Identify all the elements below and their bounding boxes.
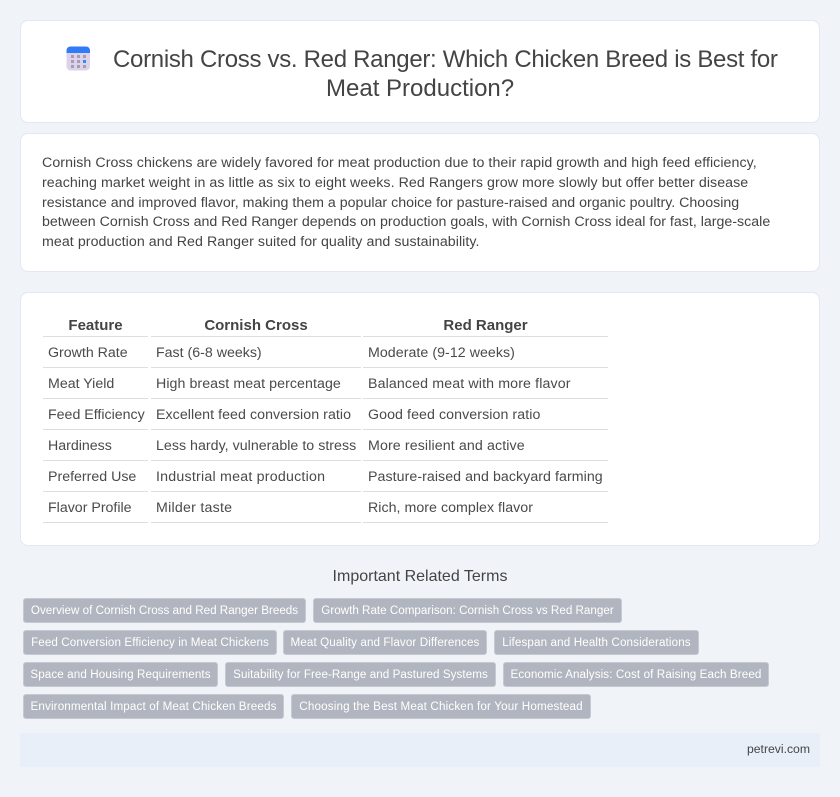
- row: preferred use: Pasture-raised and backyard farming: [368, 469, 603, 485]
- table header: Cornish Cross: [204, 317, 308, 334]
- heading: important related terms: Important Related Terms: [333, 568, 507, 585]
- tag: [283, 630, 487, 655]
- row: hardiness: Less hardy, vulnerable to stress: [156, 438, 356, 454]
- title: Cornish Cross vs. Red Ranger: Which Chicken Breed is Best for: [113, 46, 778, 73]
- panel: comparison table: [20, 292, 820, 546]
- tag: [291, 694, 591, 719]
- row: flavor profile: Flavor Profile: [48, 500, 132, 516]
- title: [113, 46, 778, 102]
- row: feed efficiency: Good feed conversion ratio: [368, 407, 540, 423]
- row: meat yield: High breast meat percentage: [156, 376, 341, 392]
- tag: [494, 630, 699, 655]
- row: hardiness: Hardiness: [48, 438, 112, 454]
- tag: Lifespan and Health Considerations: [502, 636, 691, 649]
- tag: Economic Analysis: Cost of Raising Each Breed: [510, 668, 762, 681]
- table header: [68, 317, 528, 334]
- tag: [225, 662, 496, 687]
- footer: [20, 733, 820, 767]
- row: growth rate: Growth Rate: [48, 345, 128, 361]
- icon: calendar: [66, 46, 90, 70]
- tag: [313, 598, 622, 623]
- row: growth rate: Fast (6-8 weeks): [156, 345, 262, 361]
- tag: [23, 662, 218, 687]
- tag: Environmental Impact of Meat Chicken Breeds: [30, 700, 277, 713]
- panel: introduction text: reaching market weight in as little as six to eight weeks. Red Rangers grow more slowly but offer better disease: [42, 175, 748, 191]
- row: meat yield: [48, 376, 571, 392]
- panel: introduction text: Cornish Cross chickens are widely favored for meat production due to their rapid growth and high feed efficiency,: [42, 155, 757, 171]
- row: hardiness: More resilient and active: [368, 438, 525, 454]
- tag: Overview of Cornish Cross and Red Ranger Breeds: [31, 604, 298, 617]
- row: feed efficiency: Feed Efficiency: [48, 407, 145, 423]
- tag: Growth Rate Comparison: Cornish Cross vs Red Ranger: [321, 604, 614, 617]
- footer domain: petrevi.com: [747, 742, 810, 756]
- tag: Meat Quality and Flavor Differences: [290, 636, 479, 649]
- row: meat yield: Meat Yield: [48, 376, 114, 392]
- row: meat yield: Balanced meat with more flavor: [368, 376, 571, 392]
- row: preferred use: [48, 469, 603, 485]
- row: preferred use: Industrial meat production: [156, 469, 325, 485]
- row: flavor profile: Rich, more complex flavor: [368, 500, 533, 516]
- row: feed efficiency: Excellent feed conversion ratio: [156, 407, 351, 423]
- table header: Feature: [68, 317, 123, 334]
- row: flavor profile: Milder taste: [156, 500, 232, 516]
- row: growth rate: [48, 345, 515, 361]
- tag: [23, 694, 284, 719]
- tag: [23, 630, 277, 655]
- tag: Choosing the Best Meat Chicken for Your Homestead: [299, 700, 583, 713]
- table header: Red Ranger: [443, 317, 528, 334]
- tag: Feed Conversion Efficiency in Meat Chickens: [31, 636, 269, 649]
- panel: header: [20, 20, 820, 123]
- panel: related term tags: [23, 598, 769, 719]
- row: preferred use: Preferred Use: [48, 469, 136, 485]
- tag: [503, 662, 769, 687]
- row: flavor profile: [48, 500, 533, 516]
- panel: introduction text: between Cornish Cross and Red Ranger depends on production goals, with Cornish Cross ideal for fast, large-scale: [42, 214, 770, 230]
- panel: introduction text: [20, 133, 820, 272]
- panel: introduction text: meat production and Red Ranger suited for quality and sustainability.: [42, 234, 480, 250]
- tag: [23, 598, 306, 623]
- row: growth rate: Moderate (9-12 weeks): [368, 345, 515, 361]
- panel: introduction text: resistance and improved flavor, making them a popular choice for pasture-raised and organic poultry. Choosing: [42, 195, 739, 211]
- title: Meat Production?: [326, 75, 514, 102]
- row: feed efficiency: [48, 407, 540, 423]
- tag: Suitability for Free-Range and Pastured Systems: [233, 668, 488, 681]
- tag: Space and Housing Requirements: [30, 668, 211, 681]
- row: hardiness: [48, 438, 525, 454]
